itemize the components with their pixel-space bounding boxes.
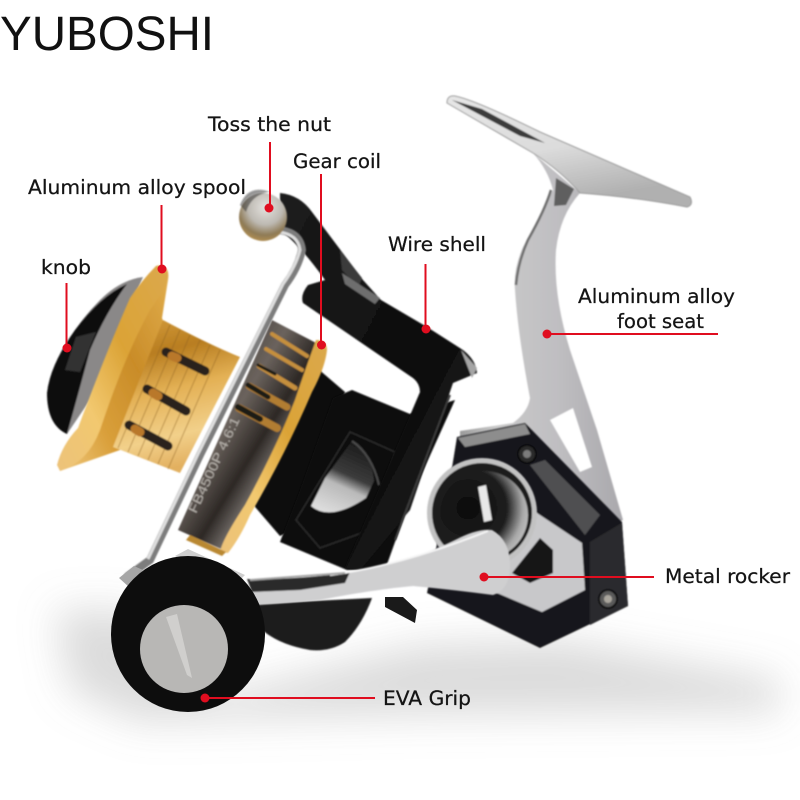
label: EVA Grip xyxy=(200,687,471,710)
label: Aluminum alloy foot seat: Aluminum alloy xyxy=(578,285,735,308)
body housing xyxy=(427,423,628,648)
label: knob: knob xyxy=(41,256,91,279)
label: Toss the nut xyxy=(207,113,331,212)
label: knob xyxy=(41,256,91,352)
spool grooves xyxy=(118,325,220,469)
label: Wire shell: Wire shell xyxy=(388,233,486,256)
gear coil rotor xyxy=(178,320,327,556)
spool body xyxy=(113,320,240,473)
grip marker xyxy=(166,614,192,678)
label: EVA Grip: EVA Grip xyxy=(383,687,471,710)
label: Metal rocker: Metal rocker xyxy=(665,565,791,588)
round hub xyxy=(427,458,537,568)
label: Aluminum alloy foot seat xyxy=(542,285,735,338)
foot seat xyxy=(447,96,691,560)
label: Toss the nut: Toss the nut xyxy=(207,113,331,136)
aluminum alloy spool xyxy=(57,265,240,473)
wire shell arm xyxy=(280,193,477,570)
dark hexagon xyxy=(512,538,553,583)
label: Aluminum alloy foot seat: foot seat xyxy=(617,310,704,333)
spool slots xyxy=(129,352,205,446)
front flange rim xyxy=(57,265,168,471)
window housing xyxy=(280,390,455,570)
drop shadow xyxy=(55,610,780,722)
spool neck and flange face xyxy=(60,266,170,471)
lower black bracket xyxy=(255,598,372,650)
screw bottom xyxy=(599,590,617,608)
central spindle xyxy=(244,362,345,536)
title: YUBOSHI xyxy=(0,8,214,61)
rear flange xyxy=(220,340,327,553)
label: Gear coil: Gear coil xyxy=(293,150,381,173)
label: Aluminum alloy spool xyxy=(28,176,246,274)
screw top xyxy=(518,445,536,463)
label: Aluminum alloy spool: Aluminum alloy spool xyxy=(28,176,246,199)
grip cap xyxy=(140,605,228,693)
metal rocker arm xyxy=(247,530,510,605)
model text: FB4500P 4.6:1 xyxy=(185,415,243,515)
bail ball xyxy=(239,193,287,241)
EVA grip xyxy=(111,549,265,712)
label: Wire shell xyxy=(388,233,486,334)
foot seat top bar xyxy=(447,96,691,207)
silver plate xyxy=(470,513,585,612)
fishing reel illustration xyxy=(47,96,691,712)
bail wire and ball xyxy=(128,190,302,576)
rotor slots xyxy=(238,334,307,428)
knob xyxy=(47,277,143,434)
label: Metal rocker xyxy=(480,565,791,588)
label: Gear coil xyxy=(293,150,381,350)
lever xyxy=(385,597,417,623)
reflective window xyxy=(311,441,374,512)
